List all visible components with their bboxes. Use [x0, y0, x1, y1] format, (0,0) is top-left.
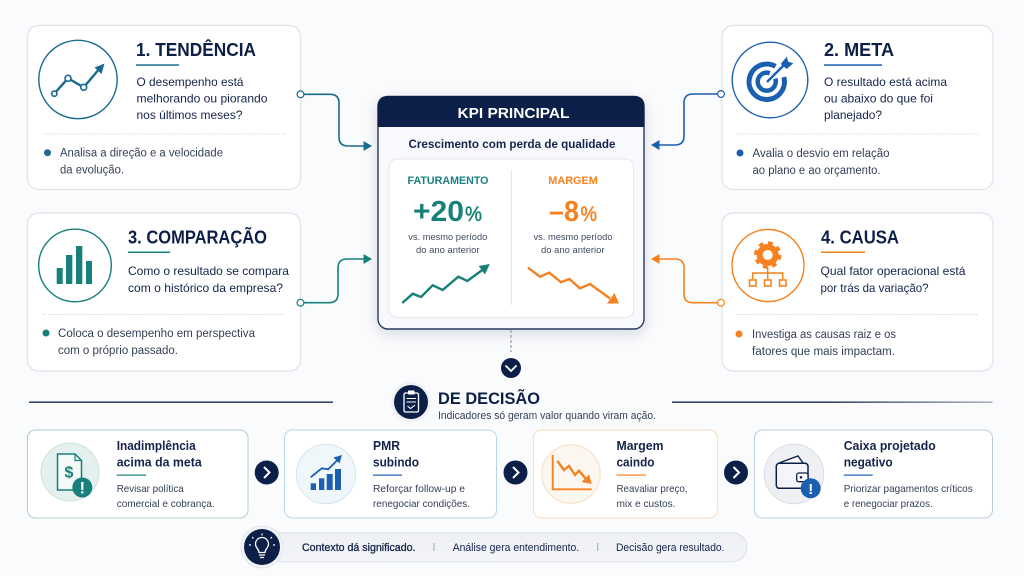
question text: ou abaixo do que foi — [824, 92, 933, 106]
question text: O resultado está acima — [824, 75, 947, 89]
icon: gear and hierarchy — [732, 230, 804, 302]
card: inadimplência — [28, 430, 248, 518]
metric: faturamento: FATURAMENTO — [408, 175, 489, 187]
bullet text: com o próprio passado. — [58, 345, 178, 357]
bullet text — [60, 148, 223, 176]
question text: com o histórico da empresa? — [128, 281, 283, 295]
icon: falling chart — [542, 445, 600, 503]
metric: margem: vs. mesmo período — [534, 232, 612, 243]
KPI subtitle: Crescimento com perda de qualidade — [408, 137, 616, 151]
KPI inner card — [389, 159, 634, 318]
bullet text: Avalia o desvio em relação — [752, 148, 890, 160]
KPI header bar — [378, 96, 644, 127]
icon: bar chart — [39, 229, 111, 302]
metric: margem: % — [580, 203, 597, 226]
question text: Como o resultado se compara — [128, 264, 289, 278]
question text — [820, 264, 966, 295]
chart: falling line — [528, 268, 619, 304]
heading: 3. Comparação: 3. COMPARAÇÃO — [128, 226, 267, 248]
card text — [373, 439, 470, 510]
bullet text: fatores que mais impactam. — [752, 346, 895, 358]
footer message: contexto: Contexto dá significado. — [302, 542, 416, 554]
question text: melhorando ou piorando — [136, 92, 268, 106]
card text: Reavaliar preço, — [616, 483, 688, 495]
icon: invoice alert: $ — [65, 464, 74, 482]
icon: rising bars — [296, 444, 356, 504]
card: margem caindo — [533, 430, 717, 518]
footer message: decisão: Decisão gera resultado. — [616, 542, 724, 554]
card text: Revisar política — [117, 483, 184, 495]
card text — [844, 439, 973, 510]
panel: KPI principal — [378, 96, 644, 329]
card text: renegociar condições. — [373, 498, 470, 510]
icon: wallet alert: ! — [808, 481, 813, 498]
card text: caindo — [616, 456, 655, 470]
chart: rising line — [402, 264, 490, 303]
card text: negativo — [844, 456, 893, 470]
question text — [824, 75, 947, 122]
bullet text — [752, 329, 896, 358]
card text: Reforçar follow-up e — [373, 483, 465, 495]
card text: Priorizar pagamentos críticos — [844, 483, 973, 495]
arrow: comparação to KPI — [297, 254, 372, 306]
connector: KPI to decision — [501, 330, 521, 378]
footer pill — [241, 526, 747, 568]
metric: faturamento: vs. mesmo período — [408, 232, 487, 243]
question text — [128, 264, 289, 295]
card text: PMR — [373, 439, 400, 453]
footer message: análise: Análise gera entendimento. — [453, 542, 579, 554]
section header: decisão — [29, 382, 992, 422]
card text: Caixa projetado — [844, 439, 936, 453]
arrow: step 3 to 4 — [724, 460, 748, 484]
panel: 1. Tendência — [28, 26, 300, 190]
question text: Qual fator operacional está — [820, 264, 966, 278]
arrow: step 2 to 3 — [504, 460, 528, 484]
card text — [616, 439, 688, 510]
bullet text: da evolução. — [60, 164, 124, 176]
question text: planejado? — [824, 108, 882, 122]
heading: 2. Meta: 2. META — [824, 40, 894, 60]
panel: 2. Meta — [722, 26, 993, 190]
icon: wallet alert — [764, 444, 824, 504]
bullet text: Investiga as causas raiz e os — [752, 329, 896, 341]
icon: invoice alert — [41, 443, 99, 501]
card text: acima da meta — [117, 456, 203, 470]
panel: 4. Causa — [722, 213, 993, 371]
bullet text: ao plano e ao orçamento. — [752, 165, 880, 177]
card text: Margem — [616, 439, 664, 453]
question text — [136, 75, 268, 122]
card: caixa projetado — [754, 430, 992, 518]
icon: target — [732, 42, 808, 118]
icon: light bulb — [241, 526, 283, 568]
icon: invoice alert: ! — [79, 478, 85, 498]
card text: mix e custos. — [616, 498, 676, 510]
question text: O desempenho está — [136, 75, 244, 89]
metric: faturamento: do ano anterior — [416, 245, 480, 256]
metric: margem: –8 — [549, 196, 579, 228]
metric: faturamento: % — [465, 203, 482, 226]
card text — [117, 439, 215, 510]
card text: e renegociar prazos. — [844, 498, 933, 510]
bullet text — [58, 328, 256, 357]
metric: margem — [528, 175, 619, 304]
heading: 4. Causa: 4. CAUSA — [821, 228, 899, 248]
card: PMR — [284, 430, 496, 518]
KPI title: KPI PRINCIPAL — [458, 106, 570, 122]
heading: 1. Tendência: 1. TENDÊNCIA — [136, 39, 256, 60]
arrow: step 1 to 2 — [255, 460, 279, 484]
card text: comercial e cobrança. — [117, 498, 215, 510]
arrow: tendência to KPI — [297, 91, 372, 151]
card text: Inadimplência — [117, 439, 197, 453]
bullet text — [752, 148, 890, 177]
bullet text: Coloca o desempenho em perspectiva — [58, 328, 256, 340]
metric: faturamento: +20 — [413, 196, 464, 228]
section title: DE DECISÃO — [438, 388, 540, 408]
metric: faturamento — [402, 175, 490, 303]
panel: 3. Comparação — [28, 213, 300, 371]
icon: trend line — [39, 40, 117, 119]
arrow: meta to KPI — [651, 91, 724, 150]
card text: subindo — [373, 456, 419, 470]
metric: margem: do ano anterior — [541, 245, 604, 256]
arrow: causa to KPI — [651, 254, 724, 306]
question text: nos últimos meses? — [136, 108, 243, 122]
section subtitle: Indicadores só geram valor quando viram ação. — [438, 410, 656, 422]
icon: clipboard — [391, 382, 431, 422]
bullet text: Analisa a direção e a velocidade — [60, 148, 223, 160]
question text: por trás da variação? — [820, 281, 929, 295]
metric: margem: MARGEM — [548, 175, 598, 187]
